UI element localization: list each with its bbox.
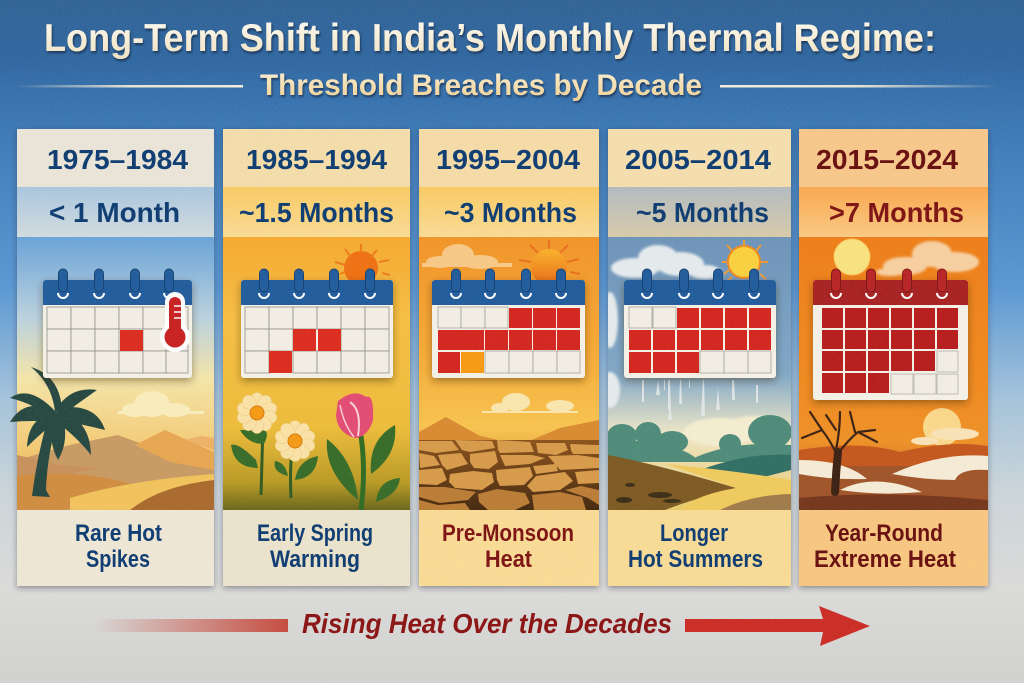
caption [419, 510, 599, 586]
months count: ~3 Months [444, 197, 577, 228]
subtitle with rules: Threshold Breaches by Decade [260, 69, 702, 102]
caption: Hot Summers [628, 546, 763, 573]
illustration: desert and palm [10, 237, 214, 510]
icon: sun [334, 244, 390, 280]
months count [223, 187, 410, 237]
calendar [241, 269, 393, 378]
panel: 2015–2024 [799, 129, 988, 586]
panel: 1975–1984 [10, 129, 214, 586]
caption: Longer [660, 520, 728, 547]
calendar [432, 269, 585, 378]
icon: daisies [231, 392, 318, 498]
decade header [17, 129, 214, 187]
months count: ~1.5 Months [239, 197, 394, 228]
decade header: 1995–2004 [436, 144, 580, 175]
months count: ~5 Months [636, 197, 769, 228]
arrow: rising heat [685, 606, 870, 646]
decade header: 2015–2024 [816, 144, 958, 175]
decade header [799, 129, 988, 187]
caption: Extreme Heat [814, 546, 956, 573]
months count: >7 Months [829, 197, 964, 228]
months count [419, 187, 599, 237]
months count [608, 187, 791, 237]
rain streaks [642, 380, 758, 420]
panel: 2005–2014 [600, 129, 792, 586]
arrow: fading tail [95, 619, 288, 632]
illustration: rain and hills [600, 237, 792, 510]
panel: 1995–2004 [419, 129, 599, 586]
caption: Early Spring [257, 520, 373, 547]
icon: palm tree [10, 367, 105, 497]
caption: Year-Round [825, 520, 943, 547]
calendar [813, 269, 968, 400]
icon: thermometer [160, 292, 190, 352]
calendar [624, 269, 776, 378]
illustration: spring flowers [223, 237, 410, 510]
caption [608, 510, 791, 586]
title: Long-Term Shift in India’s Monthly Thermal Regime: [44, 17, 936, 60]
caption: Heat [485, 546, 532, 573]
caption [223, 510, 410, 586]
caption [799, 510, 988, 586]
icon: sun [519, 240, 580, 285]
icon: bare tree [802, 412, 877, 492]
months count [799, 187, 988, 237]
caption: Warming [270, 546, 360, 573]
icon: sun [722, 240, 768, 280]
decade header [608, 129, 791, 187]
illustration: cracked earth [419, 237, 599, 510]
decade header [419, 129, 599, 187]
caption [17, 510, 214, 586]
months count [17, 187, 214, 237]
caption: Rare Hot [75, 520, 162, 547]
decade header: 1975–1984 [47, 144, 188, 175]
decade header [223, 129, 410, 187]
illustration: parched landscape [799, 237, 988, 510]
icon: sun [834, 239, 870, 275]
icon: tulip [327, 393, 400, 510]
decade header: 1985–1994 [246, 144, 387, 175]
caption: Spikes [86, 546, 150, 573]
calendar [43, 269, 192, 378]
panel: 1985–1994 [223, 129, 410, 586]
label: rising heat: Rising Heat Over the Decades [302, 608, 672, 639]
decade header: 2005–2014 [625, 144, 771, 175]
caption: Pre-Monsoon [442, 520, 574, 547]
months count: < 1 Month [49, 197, 180, 228]
